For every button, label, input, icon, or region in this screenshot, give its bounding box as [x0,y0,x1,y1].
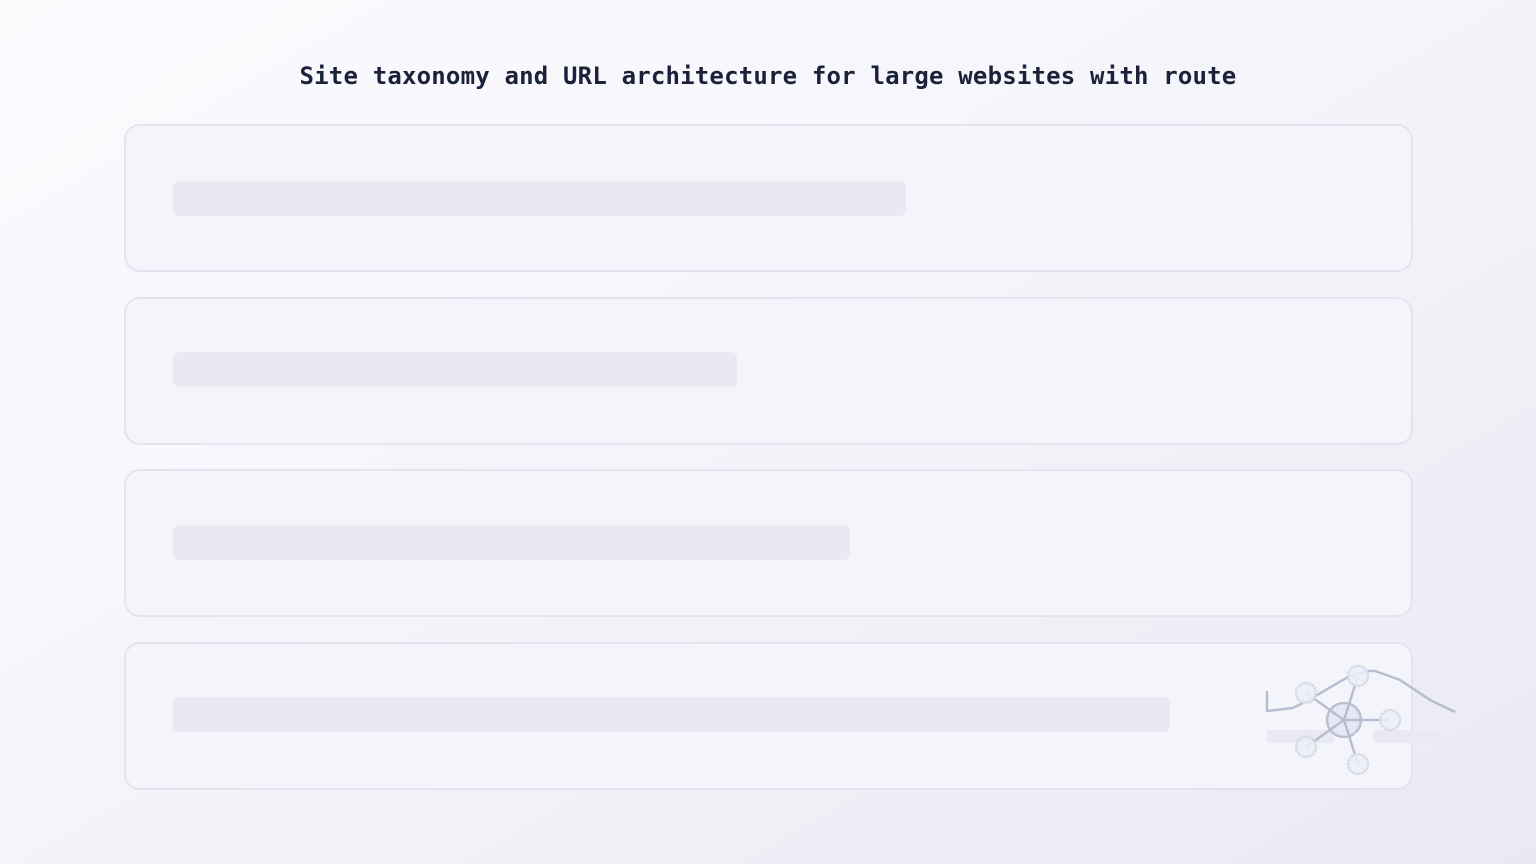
placeholder bar: row 2 [173,352,736,386]
trend line [1267,671,1455,712]
hub node [1327,703,1361,737]
panel: row 4 [124,642,1412,790]
panel: row 1 [124,124,1412,272]
network diagram icon [1266,664,1456,776]
hub spokes [1306,676,1390,764]
title: Site taxonomy and URL architecture for large websites with route [300,62,1236,90]
placeholder bar: row 1 [173,181,906,216]
small bars [1267,730,1440,743]
outer nodes [1296,666,1400,774]
small label dash [1354,734,1363,737]
panel: row 3 [124,469,1412,616]
placeholder bar: row 4 [173,697,1170,732]
panel: row 2 [124,297,1412,444]
placeholder bar: row 3 [173,525,850,560]
